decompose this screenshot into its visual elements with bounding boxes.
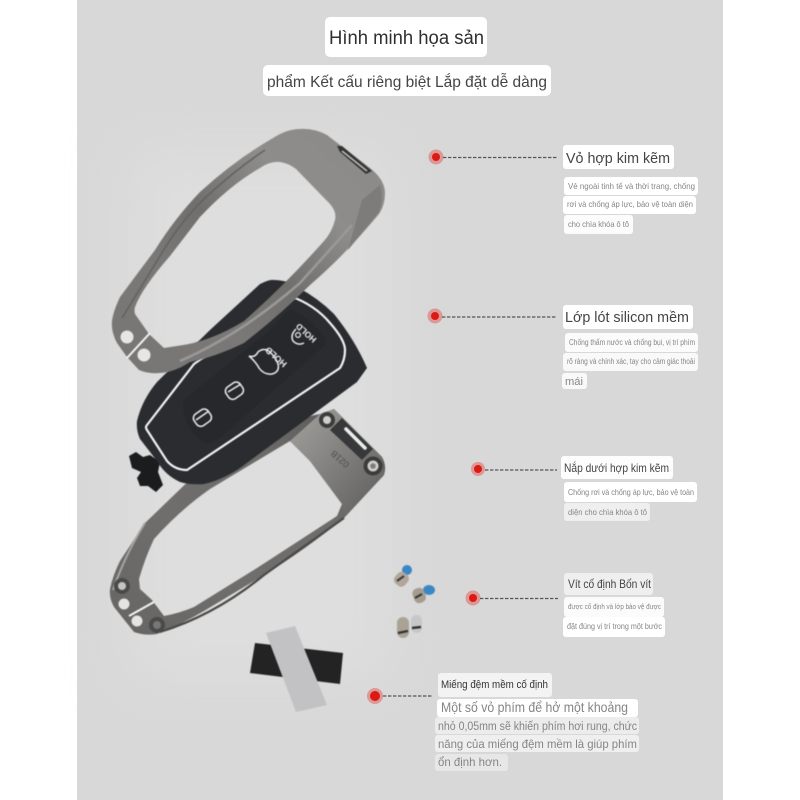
- soft key fob: [129, 280, 367, 492]
- callout: silicone liner: rõ ràng và chính xác, tay cho cảm giác thoải: [567, 357, 695, 366]
- callout: foam pad: ổn định hơn.: [438, 755, 502, 769]
- callout: fixing screws: đặt đúng vị trí trong một bước: [567, 621, 663, 631]
- screw boss bottom: [114, 578, 165, 633]
- screw 1: [392, 565, 412, 589]
- marker: zinc alloy shell: [428, 150, 558, 164]
- callout: lower cover: Chống rơi và chống áp lực, bảo vệ toàn: [568, 487, 694, 497]
- upper alloy shell: [112, 129, 385, 373]
- button icon: car hold: [249, 344, 289, 374]
- lanyard clip: [129, 452, 163, 492]
- key body: [137, 280, 367, 484]
- callout: lower cover: diện cho chìa khóa ô tô: [568, 507, 647, 517]
- callout: foam pad: [435, 673, 639, 771]
- subtitle: [263, 65, 551, 96]
- callout: foam pad: Miếng đệm mềm cố định: [441, 679, 548, 691]
- button pad: [183, 309, 326, 443]
- mounting holes: [120, 330, 150, 362]
- callout: zinc alloy shell: Vỏ hợp kim kẽm: [566, 151, 670, 167]
- callout: fixing screws: [563, 573, 665, 637]
- screws: [392, 565, 435, 638]
- title: Hình minh họa sản: [329, 28, 484, 49]
- callout: zinc alloy shell: cho chìa khóa ô tô: [568, 219, 629, 229]
- callout: foam pad: Một số vỏ phím để hở một khoảng: [441, 699, 628, 715]
- callout: fixing screws: được cố định và lớp bảo vệ được: [568, 602, 661, 611]
- callout: silicone liner: mái: [565, 376, 583, 388]
- foam pads: [250, 626, 343, 712]
- button icon: unlock: [223, 380, 245, 401]
- callout: lower cover: [561, 456, 697, 521]
- marker: silicone liner: [428, 308, 557, 324]
- subtitle: phẩm Kết cấu riêng biệt Lắp đặt dễ dàng: [267, 72, 547, 91]
- marker: lower cover: [471, 462, 557, 476]
- white outline: [146, 296, 345, 470]
- screw 4: [411, 615, 422, 633]
- callout: zinc alloy shell: [563, 145, 698, 234]
- screw 3: [397, 617, 409, 638]
- slot: [346, 429, 365, 448]
- callout: silicone liner: Lớp lót silicon mềm: [565, 309, 689, 326]
- title: [325, 17, 487, 57]
- callout: zinc alloy shell: Vẻ ngoài tinh tế và thời trang, chống: [568, 181, 695, 191]
- marker: fixing screws: [466, 590, 558, 606]
- callout: foam pad: năng của miếng đệm mềm là giúp phím: [438, 737, 637, 751]
- callout: foam pad: nhỏ 0,05mm sẽ khiến phím hơi rung, chức: [438, 721, 637, 733]
- callout: lower cover: Nắp dưới hợp kim kẽm: [564, 460, 669, 475]
- engraved code: 021B: [329, 448, 351, 470]
- marker: foam pad: [367, 688, 432, 704]
- lower alloy shell: [110, 409, 385, 635]
- button icon: lock: [191, 407, 213, 428]
- screw 2: [411, 585, 435, 605]
- screw boss top: [319, 412, 382, 476]
- button icon: car hold: HOLD: [263, 344, 289, 369]
- top slot: [337, 146, 372, 174]
- callout: silicone liner: Chống thấm nước và chống bụi, vị trí phím: [569, 338, 695, 347]
- button icon: trunk hold: HOLD: [294, 321, 318, 345]
- inner face: [290, 409, 384, 518]
- callout: silicone liner: [562, 305, 698, 389]
- callout: fixing screws: Vít cố định Bốn vít: [568, 577, 652, 591]
- callout: zinc alloy shell: rơi và chống áp lực, bảo vệ toàn diện: [567, 199, 693, 209]
